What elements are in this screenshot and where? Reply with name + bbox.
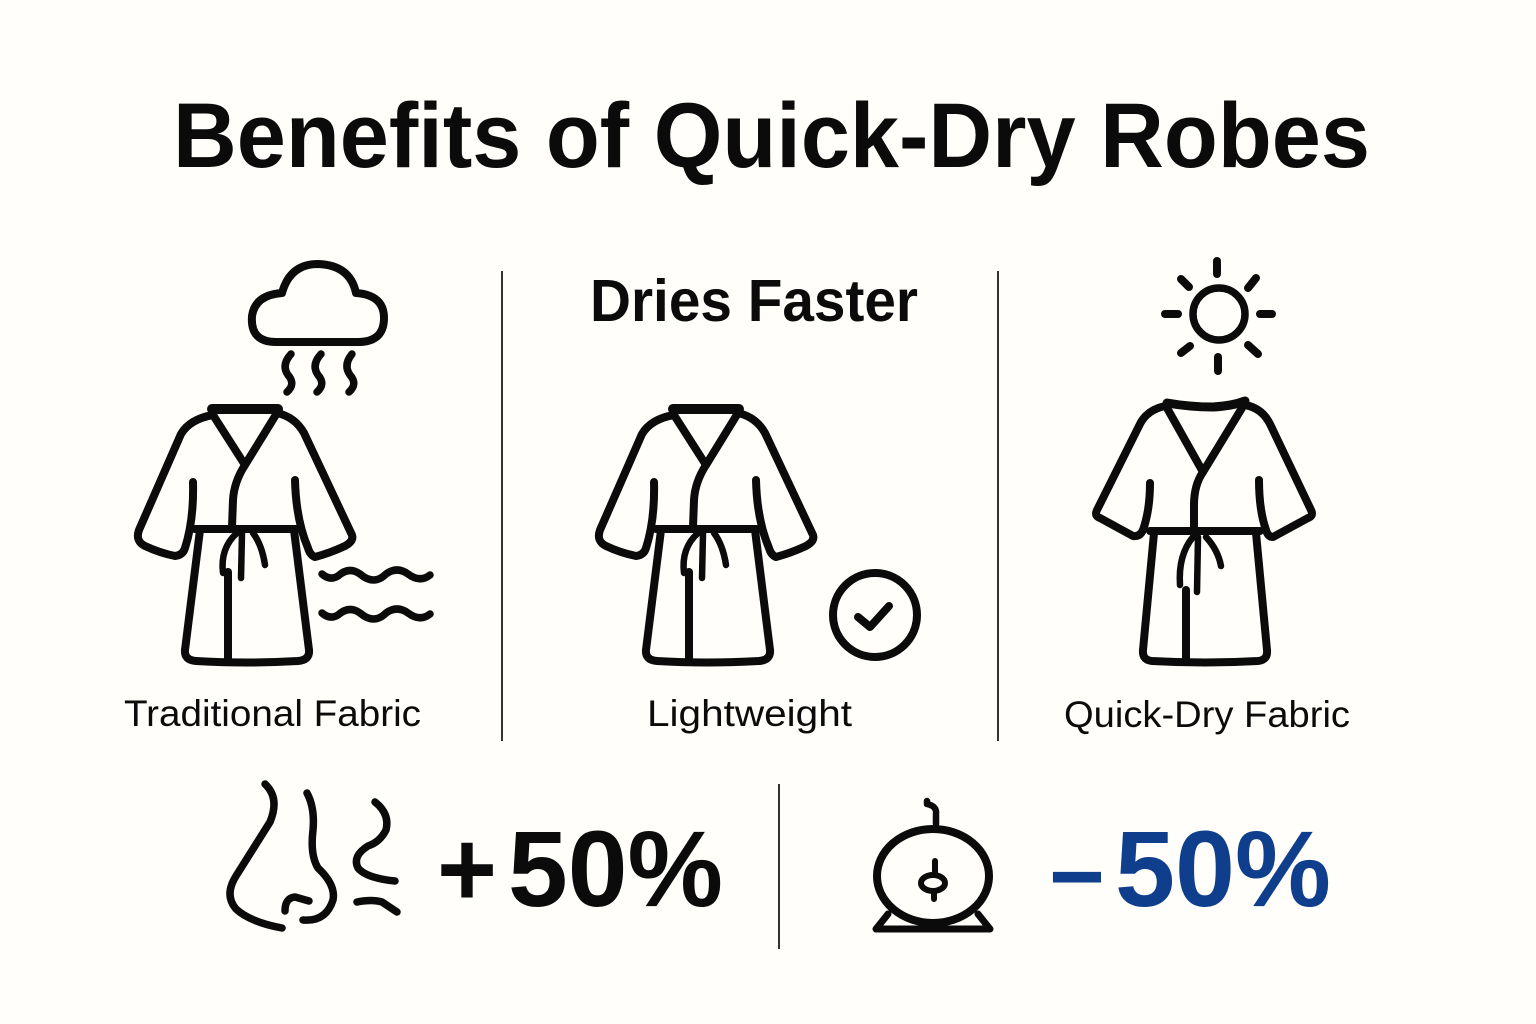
stat: -50%: – [1050,808,1104,929]
stat: +50%: + [437,808,497,929]
panel: cost reduction [876,801,1331,929]
stat: +50%: 50% [508,808,723,929]
icon: water waves [322,570,430,619]
icon: robe [599,409,813,662]
stat: -50%: 50% [1115,808,1331,929]
title: Benefits of Quick-Dry Robes [173,85,1370,187]
icon: vapor lines [285,354,354,392]
panel: quick-dry fabric [1064,261,1350,735]
heading: dries faster: Dries Faster [590,268,918,334]
icon: sun [1165,261,1272,371]
label: lightweight: Lightweight [647,693,853,734]
icon: rain cloud [252,264,384,342]
label: traditional fabric: Traditional Fabric [124,693,421,734]
icon: robe [1096,401,1312,662]
icon: check circle [833,573,917,657]
panel: dries faster [590,268,918,734]
icon: nose with scent lines [230,784,397,928]
panel: odor reduction [230,784,723,929]
icon: robe [138,409,352,662]
panel: traditional fabric [124,264,430,734]
icon: piggy coin [876,801,990,929]
label: quick-dry fabric: Quick-Dry Fabric [1064,694,1350,735]
